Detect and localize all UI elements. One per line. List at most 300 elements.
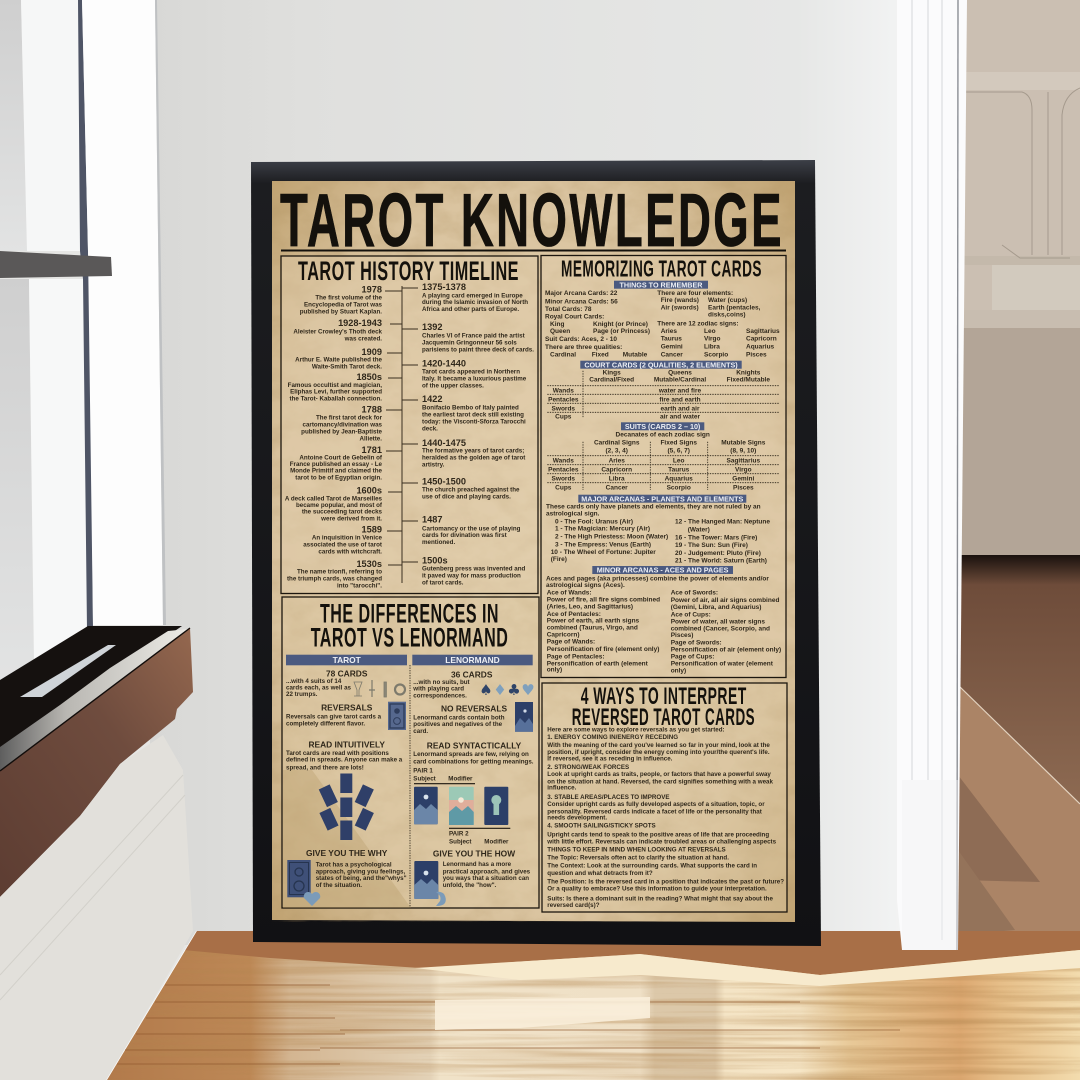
column divider bbox=[409, 665, 411, 908]
text block: elements and zodiac signs: Cancer bbox=[661, 351, 683, 358]
text block: card counts: Mutable bbox=[623, 351, 648, 358]
table: court cards: water and fire bbox=[658, 388, 702, 395]
adjoining room to the right bbox=[955, 0, 1080, 960]
text block: four ways: personality. Reversed cards indicate a facet of life or the personality that bbox=[547, 808, 762, 815]
banner: major arcanas: MAJOR ARCANAS - PLANETS AND ELEMENTS bbox=[581, 494, 743, 503]
entry: 1420-1440: Italy. It became a luxurious pastime bbox=[422, 375, 527, 382]
entry: 1600s: 1600s bbox=[356, 485, 382, 495]
floor bbox=[107, 931, 1080, 1080]
block: read syntactically: Modifier bbox=[448, 776, 473, 783]
entry: 1788 bbox=[301, 404, 383, 442]
entry: 1422: today: the Visconti-Sforza Tarocchi bbox=[422, 418, 526, 425]
block: read intuitively: defined in spreads. Anyone can make a bbox=[286, 757, 403, 764]
entry: 1928-1943: 1928-1943 bbox=[338, 318, 382, 328]
entry: 1500s: of tarot cards. bbox=[422, 579, 464, 586]
text block: things to keep in mind: The Position: Is the reversed card in a position that indicates the past or future? bbox=[547, 878, 784, 885]
block: give you the why: states of being, and the"whys" bbox=[316, 875, 407, 882]
table: suits and decanates: Leo bbox=[673, 457, 685, 464]
entry: 1422: 1422 bbox=[422, 394, 442, 404]
window sill: dark frame, light top, wooden face bbox=[0, 626, 193, 897]
block: give you the how: you ways that a situation can bbox=[443, 875, 529, 882]
entry: 1978: 1978 bbox=[362, 285, 382, 295]
icon: lenormand card with spade bbox=[414, 861, 446, 906]
entry: 1420-1440: of the upper classes. bbox=[422, 382, 484, 389]
entry: 1589: An inquisition in Venice bbox=[312, 534, 383, 541]
text block: card counts: Fixed bbox=[592, 351, 609, 358]
entry: 1781 bbox=[290, 445, 383, 481]
banner: minor arcanas: MINOR ARCANAS - ACES AND PAGES bbox=[597, 566, 729, 575]
table: suits and decanates: (8, 9, 10) bbox=[730, 448, 756, 455]
table: suits and decanates: Cups bbox=[555, 485, 572, 492]
block: 36 cards: ...with no suits, but bbox=[413, 679, 470, 686]
entry: 1781: Monde Primitif and claimed the bbox=[290, 468, 383, 475]
text block: four ways: position, if upright, consider the energy coming into your/the querent's life. bbox=[547, 749, 770, 756]
entry: 1978: Encyclopedia of Tarot was bbox=[304, 301, 383, 308]
block: read intuitively bbox=[286, 740, 403, 840]
text block: aces and pages: Personification of water (element bbox=[671, 661, 774, 668]
entry: 1392: Charles VI of France paid the artist bbox=[422, 332, 525, 339]
table: suits and decanates: Cardinal Signs bbox=[594, 440, 640, 447]
room background: white wall bbox=[150, 0, 910, 945]
text block: major arcana rulers bbox=[546, 503, 770, 565]
entry: 1850s bbox=[288, 372, 382, 402]
block: give you the why: Tarot has a psychological bbox=[316, 862, 392, 869]
text block: major arcana rulers: (Fire) bbox=[551, 556, 567, 563]
text block: aces and pages: Personification of earth (element bbox=[547, 660, 649, 667]
entry: 1928-1943 bbox=[293, 318, 383, 342]
table: court cards: Fixed/Mutable bbox=[727, 377, 770, 384]
table: suits and decanates: Pentacles bbox=[548, 466, 579, 473]
text block: elements and zodiac signs bbox=[657, 290, 780, 358]
card: sunrise mountains bbox=[449, 787, 474, 825]
table: court cards: Pentacles bbox=[548, 397, 579, 404]
block: 36 cards bbox=[412, 669, 535, 700]
text block: aces and pages: Power of air, all air signs combined bbox=[671, 597, 779, 604]
text block: things to keep in mind bbox=[547, 847, 784, 909]
text block: four ways bbox=[546, 727, 777, 846]
entry: 1450-1500 bbox=[422, 477, 520, 501]
text block: major arcana rulers: 0 - The Fool: Uranus (Air) bbox=[555, 518, 633, 525]
table: court cards: Swords bbox=[552, 405, 575, 412]
text block: aces and pages: (Aries, Leo, and Sagittarius) bbox=[547, 603, 633, 610]
block: read syntactically: Subject bbox=[449, 838, 471, 845]
text block: things to keep in mind: Or a quality to embrace? Use this information to guide your interpretation. bbox=[547, 886, 767, 893]
block: read syntactically: card combinations for getting meanings. bbox=[413, 758, 534, 765]
banner: court cards: COURT CARDS (2 QUALITIES, 2 ELEMENTS) bbox=[584, 360, 738, 369]
entry: 1487: Cartomancy or the use of playing bbox=[422, 525, 521, 532]
table: suits and decanates: (2, 3, 4) bbox=[605, 448, 628, 455]
panel: memorizing tarot cards bbox=[541, 256, 786, 678]
text block: aces and pages: Ace of Cups: bbox=[671, 612, 711, 619]
banner: tarot bbox=[286, 655, 407, 665]
entry: 1530s: into "tarocchi". bbox=[337, 582, 382, 589]
text block: major arcana rulers: 20 - Judgement: Pluto (Fire) bbox=[675, 550, 761, 557]
entry: 1589: associated the use of tarot bbox=[303, 541, 382, 548]
text block: major arcana rulers: 21 - The World: Saturn (Earth) bbox=[675, 558, 767, 565]
entry: 1909: Waite-Smith Tarot deck. bbox=[312, 364, 382, 371]
text block: elements and zodiac signs: Air (swords) bbox=[661, 305, 699, 312]
text block: elements and zodiac signs: Capricorn bbox=[746, 336, 777, 343]
table: suits and decanates: Capricorn bbox=[601, 466, 632, 473]
text block: aces and pages: Personification of fire (element only) bbox=[547, 646, 659, 653]
text block: elements and zodiac signs: Aries bbox=[661, 328, 677, 335]
text block: aces and pages: Page of Swords: bbox=[671, 640, 722, 647]
entry: 1600s bbox=[285, 485, 383, 523]
text block: major arcana rulers: (Water) bbox=[688, 526, 710, 533]
entry: 1420-1440 bbox=[422, 359, 527, 389]
entry: 1788: Alliette. bbox=[360, 435, 382, 442]
text block: four ways: 1. ENERGY COMING IN/ENERGY RECEDING bbox=[547, 734, 678, 741]
entry: 1422: deck. bbox=[422, 425, 438, 432]
block: reversals: REVERSALS bbox=[321, 702, 373, 712]
heading: 4 ways: 4 WAYS TO INTERPRET bbox=[581, 683, 747, 710]
card: night mountains bbox=[414, 787, 438, 824]
entry: 1978 bbox=[300, 285, 383, 315]
text block: four ways: If reversed, see it as receding in influence. bbox=[547, 755, 673, 762]
entry: 1487: cards for divination was first bbox=[422, 532, 507, 539]
icon: lenormand card bbox=[515, 702, 533, 732]
entry: 1392: 1392 bbox=[422, 322, 442, 332]
entry: 1440-1475 bbox=[422, 438, 525, 469]
entry: 1422: Bonifacio Bembo of Italy painted bbox=[422, 404, 519, 411]
text block: aces and pages: only) bbox=[671, 667, 686, 674]
entry: 1589 bbox=[303, 525, 383, 555]
entry: 1788: cartomancy/divination was bbox=[302, 421, 383, 428]
block: reversals: completely different flavor. bbox=[286, 721, 365, 728]
text block: things to keep in mind: THINGS TO KEEP IN MIND WHEN LOOKING AT REVERSALS bbox=[547, 847, 726, 854]
text block: aces and pages bbox=[546, 575, 781, 674]
text block: four ways: 2. STRONG/WEAK FORCES bbox=[547, 764, 629, 771]
entry: 1420-1440: 1420-1440 bbox=[422, 359, 466, 369]
block: 36 cards: with playing card bbox=[412, 686, 464, 693]
block: 36 cards: correspondences. bbox=[413, 693, 467, 700]
text block: major arcana rulers: 3 - The Empress: Venus (Earth) bbox=[555, 541, 651, 548]
entry: 1781: France published an essay - Le bbox=[290, 461, 383, 468]
heading: 4 ways bbox=[572, 683, 755, 731]
entry: 1500s: 1500s bbox=[422, 555, 448, 565]
table: suits and decanates: Aquarius bbox=[665, 476, 693, 483]
table: court cards: earth and air bbox=[660, 405, 700, 412]
block: give you the why: approach, giving you feelings, bbox=[316, 868, 405, 875]
entry: 1487 bbox=[422, 515, 521, 546]
entry: 1928-1943: Aleister Crowley's Thoth deck bbox=[293, 328, 383, 335]
entry: 1781: tarot to be of Egyptian origin. bbox=[295, 474, 382, 481]
timeline axis and ticks bbox=[385, 286, 418, 583]
icons: playing card suits bbox=[479, 681, 535, 699]
entry: 1928-1943: was created. bbox=[344, 335, 382, 342]
entry: 1440-1475: artistry. bbox=[422, 462, 445, 469]
heading: memorizing: MEMORIZING TAROT CARDS bbox=[561, 256, 762, 282]
entry: 1600s: the succeeding tarot decks bbox=[302, 509, 383, 516]
banner: tarot: TAROT bbox=[333, 655, 362, 665]
text block: major arcana rulers: 19 - The Sun: Sun (Fire) bbox=[675, 542, 748, 549]
block: give you the how bbox=[414, 849, 531, 906]
block: give you the how: GIVE YOU THE HOW bbox=[433, 849, 515, 859]
block: give you the how: unfold, the "how". bbox=[443, 882, 497, 889]
text block: major arcana rulers: These cards only have planets and elements, they are not ruled by an bbox=[546, 503, 761, 510]
door trim on the right of the wall bbox=[897, 0, 967, 950]
block: give you the why: of the situation. bbox=[316, 882, 362, 889]
entry: 1375-1378: Africa and other parts of Europe. bbox=[422, 306, 519, 313]
icon: tarot card back bbox=[388, 702, 406, 730]
panel: tarot history timeline bbox=[281, 256, 538, 594]
entry: 1440-1475: 1440-1475 bbox=[422, 438, 466, 448]
text block: elements and zodiac signs: disks,coins) bbox=[708, 312, 746, 319]
entry: 1909: Arthur E. Waite published the bbox=[295, 357, 383, 364]
block: give you the how: practical approach, and gives bbox=[443, 868, 531, 875]
text block: aces and pages: Ace of Wands: bbox=[547, 590, 592, 597]
text block: elements and zodiac signs: Earth (pentacles, bbox=[708, 305, 761, 312]
text block: aces and pages: Capricorn) bbox=[547, 631, 580, 638]
heading: timeline: TAROT HISTORY TIMELINE bbox=[298, 256, 519, 286]
entry: 1487: mentioned. bbox=[422, 539, 455, 546]
text block: elements and zodiac signs: There are four elements: bbox=[657, 290, 733, 297]
text block: card counts: Suit Cards: Aces, 2 - 10 bbox=[545, 336, 617, 343]
icons: playing card suits: ♠ bbox=[479, 681, 493, 699]
entry: 1850s: Famous occultist and magician, bbox=[288, 382, 382, 389]
entry: 1589: 1589 bbox=[362, 525, 382, 535]
text block: card counts: Major Arcana Cards: 22 bbox=[545, 290, 618, 297]
table: suits and decanates: Sagittarius bbox=[727, 457, 760, 464]
text block: elements and zodiac signs: Sagittarius bbox=[746, 328, 780, 335]
text block: four ways: on the situation at hand. Reversed, the card signifies something with a weak bbox=[547, 778, 773, 785]
table: court cards: Wands bbox=[553, 388, 574, 395]
entry: 1978: published by Stuart Kaplan. bbox=[300, 308, 382, 315]
text block: four ways: 4. SMOOTH SAILING/STICKY SPOTS bbox=[547, 823, 656, 830]
table: suits and decanates: Taurus bbox=[668, 466, 690, 473]
text block: elements and zodiac signs: Fire (wands) bbox=[661, 297, 699, 304]
entry: 1530s: 1530s bbox=[356, 559, 382, 569]
block: no reversals bbox=[413, 702, 533, 735]
entry: 1450-1500: use of dice and playing cards. bbox=[422, 494, 511, 501]
block: no reversals: positives and negatives of the bbox=[413, 721, 503, 728]
text block: things to keep in mind: reversed card(s)? bbox=[547, 902, 600, 909]
entry: 1788: The first tarot deck for bbox=[316, 414, 383, 421]
text block: card counts: Queen bbox=[550, 328, 570, 335]
text block: four ways: Look at upright cards as traits, people, or factors that have a powerful sway bbox=[547, 771, 771, 778]
table: suits and decanates: Libra bbox=[609, 476, 625, 483]
text block: aces and pages: Page of Cups: bbox=[671, 654, 714, 661]
entry: 1788: 1788 bbox=[362, 404, 382, 414]
table: court cards: air and water bbox=[660, 413, 701, 420]
block: read syntactically: Lenormand spreads are few, relying on bbox=[413, 751, 529, 758]
entry: 1375-1378: A playing card emerged in Europe bbox=[422, 292, 523, 299]
entry: 1530s: The name trionfi, referring to bbox=[297, 569, 382, 576]
text block: aces and pages: combined (Cancer, Scorpio, and bbox=[671, 625, 770, 632]
table: suits and decanates: Mutable Signs bbox=[721, 440, 766, 447]
entry: 1850s: Eliphas Levi, further supported bbox=[290, 389, 382, 396]
poster paper bbox=[272, 181, 795, 922]
table: suits and decanates: Fixed Signs bbox=[660, 440, 697, 447]
heading: 4 ways: REVERSED TAROT CARDS bbox=[572, 704, 755, 731]
table: court cards bbox=[547, 370, 779, 420]
text block: things to keep in mind: The Topic: Reversals often act to clarify the situation at hand. bbox=[547, 854, 729, 861]
table: suits and decanates: Virgo bbox=[735, 466, 752, 473]
text block: four ways: With the meaning of the card you've learned so far in your mind, look at the bbox=[547, 742, 770, 749]
text block: aces and pages: Ace of Swords: bbox=[671, 590, 718, 597]
poster frame bbox=[251, 160, 821, 946]
text block: aces and pages: Aces and pages (aka princesses) combine the power of elements and/or bbox=[546, 575, 769, 582]
icons: playing card suits: ♣ bbox=[507, 681, 521, 699]
table: court cards: Knights bbox=[736, 370, 761, 376]
text block: things to keep in mind: The Context: Look at the surrounding cards. What supports the card in bbox=[547, 863, 757, 870]
table: suits and decanates: Wands bbox=[553, 457, 574, 464]
entry: 1375-1378: 1375-1378 bbox=[422, 282, 466, 292]
wall panel below the window bbox=[0, 735, 197, 1080]
entry: 1788: published by Jean-Baptiste bbox=[301, 428, 383, 435]
text block: card counts: King bbox=[550, 321, 564, 328]
heading: differences: TAROT VS LENORMAND bbox=[311, 623, 508, 653]
table: court cards: Mutable/Cardinal bbox=[654, 377, 706, 384]
text block: card counts: Total Cards: 78 bbox=[545, 306, 592, 313]
text block: elements and zodiac signs: Scorpio bbox=[704, 351, 728, 358]
table: suits and decanates: Cancer bbox=[606, 485, 628, 492]
banner: things to remember: THINGS TO REMEMBER bbox=[620, 280, 703, 289]
block: give you the why bbox=[287, 848, 407, 906]
text block: aces and pages: Pisces) bbox=[671, 632, 693, 639]
entry: 1440-1475: heralded as the golden age of tarot bbox=[422, 454, 525, 461]
text block: elements and zodiac signs: Pisces bbox=[746, 351, 767, 358]
table: court cards: Cardinal/Fixed bbox=[589, 377, 634, 384]
table: suits and decanates: (5, 6, 7) bbox=[667, 448, 690, 455]
block: read syntactically: Modifier bbox=[484, 838, 509, 845]
text block: elements and zodiac signs: Water (cups) bbox=[708, 297, 747, 304]
block: give you the how: Lenormand has a more bbox=[443, 861, 512, 868]
text block: elements and zodiac signs: Virgo bbox=[704, 336, 721, 343]
text block: major arcana rulers: 2 - The High Priestess: Moon (Water) bbox=[555, 534, 668, 541]
table: suits and decanates: Aries bbox=[609, 457, 625, 464]
text block: aces and pages: (Gemini, Libra, and Aquarius) bbox=[671, 604, 761, 611]
entry: 1440-1475: The formative years of tarot cards; bbox=[422, 448, 524, 455]
entry: 1500s: it paved way for mass production bbox=[422, 572, 521, 579]
table: court cards: Kings bbox=[603, 370, 621, 376]
entry: 1420-1440: Tarot cards appeared in Northern bbox=[422, 368, 520, 375]
text block: aces and pages: Page of Pentacles: bbox=[547, 653, 605, 660]
block: read syntactically: Subject bbox=[413, 776, 436, 783]
text block: card counts bbox=[545, 290, 650, 358]
table: suits and decanates: Gemini bbox=[732, 476, 755, 483]
text block: four ways: needs development. bbox=[547, 814, 607, 821]
block: read syntactically: PAIR 2 bbox=[449, 831, 469, 838]
heading: differences: THE DIFFERENCES IN bbox=[320, 598, 499, 628]
block: no reversals: Lenormand cards contain both bbox=[413, 714, 505, 721]
panel: 4 ways to interpret reversed tarot cards bbox=[542, 683, 787, 912]
entry: 1530s: the triumph cards, was changed bbox=[287, 575, 382, 582]
block: read intuitively: Tarot cards are read with positions bbox=[286, 750, 389, 757]
entry: 1392: parisiens to paint three deck of cards. bbox=[422, 346, 534, 353]
block: 36 cards: 36 CARDS bbox=[451, 669, 493, 679]
text block: aces and pages: combined (Taurus, Virgo, and bbox=[547, 624, 638, 631]
entry: 1909 bbox=[295, 347, 383, 371]
text block: four ways: Upright cards tend to speak to the positive areas of life that are proceeding bbox=[547, 831, 769, 838]
panel: differences in tarot vs lenormand bbox=[282, 597, 539, 908]
table: court cards: Cups bbox=[555, 413, 572, 420]
block: read syntactically bbox=[413, 740, 534, 845]
banner: suits: SUITS (CARDS 2 – 10) bbox=[625, 422, 701, 431]
block: 78 cards: 22 trumps. bbox=[286, 691, 318, 698]
text block: major arcana rulers: 10 - The Wheel of Fortune: Jupiter bbox=[551, 549, 656, 556]
text block: major arcana rulers: 12 - The Hanged Man: Neptune bbox=[675, 519, 770, 526]
heading: differences bbox=[311, 598, 508, 653]
text block: aces and pages: Power of fire, all fire signs combined bbox=[547, 597, 660, 604]
entry: 1850s: the Tarot- Kaballah connection. bbox=[290, 395, 382, 402]
text block: aces and pages: Personification of air (element only) bbox=[671, 647, 781, 654]
text block: card counts: There are three qualities: bbox=[545, 344, 622, 351]
block: read syntactically: PAIR 1 bbox=[413, 768, 433, 775]
block: 78 cards: ...with 4 suits of 14 bbox=[286, 678, 342, 685]
entry: 1487: 1487 bbox=[422, 515, 442, 525]
entry: 1375-1378 bbox=[422, 282, 528, 313]
entry: 1392: Jacquemin Gringonneur 56 sols bbox=[422, 339, 517, 346]
text block: card counts: Royal Court Cards: bbox=[545, 313, 604, 320]
block: read syntactically: READ SYNTACTICALLY bbox=[427, 740, 522, 750]
table: suits and decanates: Pisces bbox=[733, 485, 754, 492]
text block: four ways: Here are some ways to explore reversals as you get started: bbox=[547, 727, 725, 734]
icons: playing card suits: ♦ bbox=[493, 681, 507, 699]
entry: 1392 bbox=[422, 322, 534, 353]
entry: 1600s: became popular, and most of bbox=[296, 502, 383, 509]
block: read intuitively: spread, and there are lots! bbox=[286, 764, 364, 771]
entry: 1450-1500: The church preached against the bbox=[422, 487, 520, 494]
entry: 1978: The first volume of the bbox=[315, 294, 383, 301]
icons: playing card suits: ♥ bbox=[521, 681, 535, 699]
table: suits and decanates: Scorpio bbox=[667, 485, 691, 492]
text block: aces and pages: Power of earth, all earth signs bbox=[547, 618, 640, 625]
block: give you the why: GIVE YOU THE WHY bbox=[306, 848, 388, 858]
text block: things to keep in mind: question and what detracts from it? bbox=[547, 870, 653, 877]
block: reversals bbox=[286, 702, 406, 730]
block: no reversals: NO REVERSALS bbox=[441, 704, 507, 714]
block: 78 cards: cards each, as well as bbox=[286, 684, 352, 691]
text block: four ways: with little effort. Reversals can indicate troubled areas or challenging aspects bbox=[546, 839, 777, 846]
entry: 1500s: Gutenberg press was invented and bbox=[422, 565, 526, 572]
entry: 1530s bbox=[287, 559, 382, 589]
text block: elements and zodiac signs: There are 12 zodiac signs: bbox=[657, 320, 739, 327]
text block: four ways: influence. bbox=[547, 785, 577, 792]
block: 78 cards: 78 CARDS bbox=[326, 668, 368, 678]
entry: 1450-1500: 1450-1500 bbox=[422, 477, 466, 487]
window on the left bbox=[0, 0, 166, 680]
text block: major arcana rulers: astrological sign. bbox=[546, 510, 600, 517]
text block: aces and pages: Page of Wands: bbox=[547, 639, 595, 646]
entry: 1589: cards with witchcraft. bbox=[318, 548, 382, 555]
diagram: card spread bbox=[319, 774, 374, 840]
text block: things to keep in mind: Suits: Is there a dominant suit in the reading? What might that say about the bbox=[547, 896, 773, 903]
text block: four ways: 3. STABLE AREAS/PLACES TO IMPROVE bbox=[547, 794, 670, 801]
entry: 1781: 1781 bbox=[362, 445, 382, 455]
entry: 1850s: 1850s bbox=[356, 372, 382, 382]
block: no reversals: card. bbox=[413, 728, 428, 735]
text block: major arcana rulers: 1 - The Magician: Mercury (Air) bbox=[555, 526, 650, 533]
entry: 1600s: A deck called Tarot de Marseilles bbox=[285, 495, 383, 502]
table: suits and decanates: Swords bbox=[552, 476, 575, 483]
text block: elements and zodiac signs: Gemini bbox=[661, 344, 683, 351]
text block: aces and pages: Ace of Pentacles: bbox=[547, 611, 601, 618]
entry: 1422: the earliest tarot deck still existing bbox=[422, 411, 524, 418]
text block: aces and pages: only) bbox=[547, 667, 562, 674]
entry: 1375-1378: during the Islamic invasion of North bbox=[422, 299, 528, 306]
block: reversals: Reversals can give tarot cards a bbox=[286, 714, 382, 721]
text block: card counts: Minor Arcana Cards: 56 bbox=[545, 298, 618, 305]
entry: 1909: 1909 bbox=[362, 347, 382, 357]
card: keyhole bbox=[484, 787, 508, 825]
text block: elements and zodiac signs: Leo bbox=[704, 328, 716, 335]
text block: card counts: Cardinal bbox=[550, 351, 576, 358]
text block: elements and zodiac signs: Taurus bbox=[661, 336, 682, 343]
banner: lenormand bbox=[412, 655, 533, 665]
icon: tarot card with heart bbox=[287, 860, 320, 906]
entry: 1422 bbox=[422, 394, 526, 432]
